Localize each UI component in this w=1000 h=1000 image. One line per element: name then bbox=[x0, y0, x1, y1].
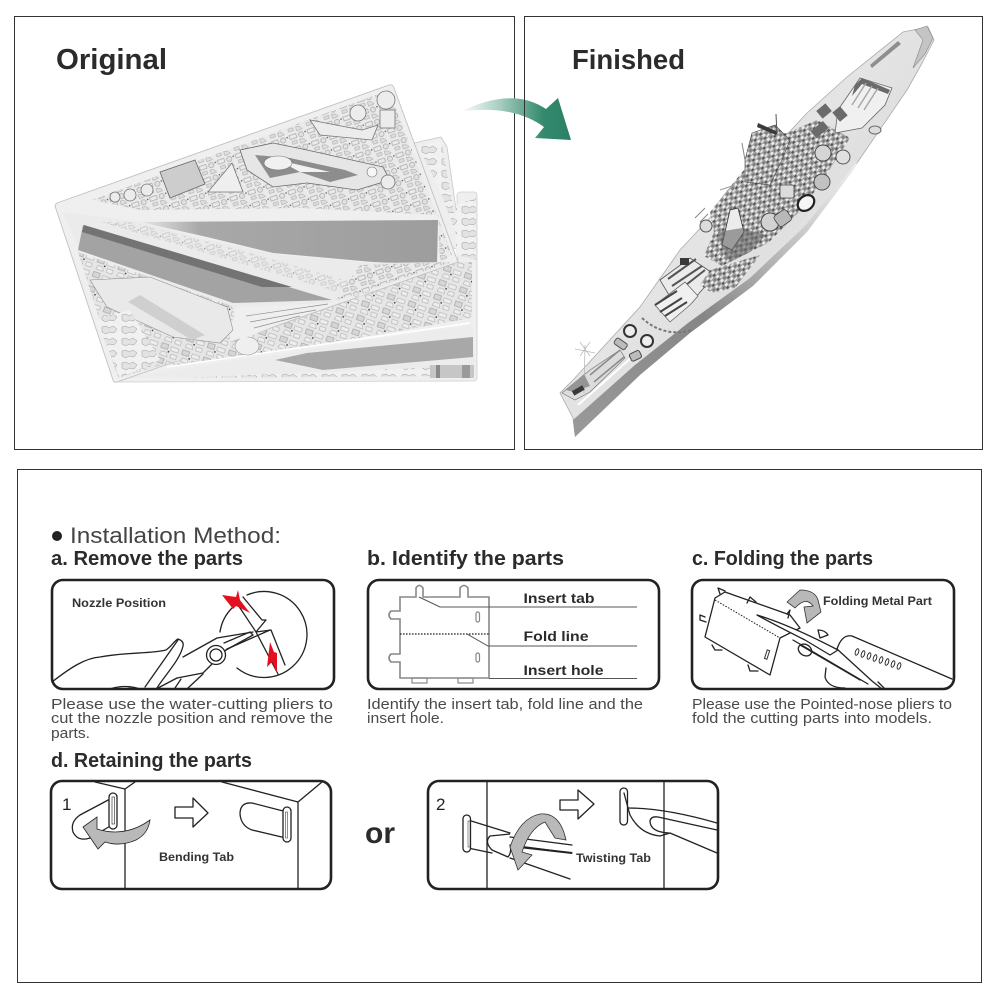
tab left bbox=[468, 820, 510, 853]
deck block part bbox=[160, 160, 205, 198]
step b: identify the parts bbox=[367, 548, 659, 727]
heading a: a. Remove the parts bbox=[51, 548, 243, 570]
hull deck plan bbox=[240, 143, 390, 190]
label: nozzle position: Nozzle Position bbox=[72, 598, 166, 610]
illustration c bbox=[692, 580, 954, 689]
caption c: Please use the Pointed-nose pliers to bbox=[692, 696, 952, 713]
sheet: top-most with hull deck bbox=[55, 85, 458, 382]
triangular part bbox=[208, 163, 243, 192]
caption a: Please use the water-cutting pliers to bbox=[51, 696, 333, 713]
nozzle detail circle bbox=[220, 592, 307, 678]
heading b: b. Identify the parts bbox=[367, 548, 564, 570]
box edges bbox=[95, 782, 322, 889]
metal sheet being folded bbox=[705, 592, 800, 675]
hull bbox=[560, 27, 934, 435]
turrets and gear bbox=[695, 145, 850, 232]
label: insert tab: Insert tab bbox=[524, 590, 594, 606]
bent tab left bbox=[72, 798, 112, 839]
sheet: back-middle bbox=[405, 137, 462, 250]
step c: folding the parts bbox=[692, 548, 954, 727]
forward deck structure bbox=[811, 26, 933, 138]
tab right with pliers bbox=[620, 788, 628, 825]
caption c: fold the cutting parts into models. bbox=[692, 710, 932, 727]
red cut marks bbox=[222, 590, 250, 613]
panel: finished bbox=[524, 16, 982, 450]
gear parts bbox=[110, 91, 395, 202]
section heading: Installation Method: bbox=[70, 523, 281, 548]
leader lines bbox=[419, 597, 637, 678]
slots and bottom tabs bbox=[412, 612, 480, 683]
caption b: Identify the insert tab, fold line and the bbox=[367, 696, 643, 713]
sheet: front bbox=[115, 192, 477, 382]
pliers bbox=[52, 597, 285, 689]
heading: original: Original bbox=[56, 44, 167, 76]
pliers on tab bbox=[487, 834, 511, 857]
panel: original bbox=[14, 16, 514, 450]
box edges bbox=[487, 782, 664, 889]
step d: retaining the parts bbox=[51, 750, 718, 889]
hull side band bbox=[573, 162, 857, 437]
battleship model bbox=[560, 26, 934, 437]
label: twisting tab: Twisting Tab bbox=[576, 853, 651, 865]
stern and mast bbox=[562, 342, 625, 400]
caption b: insert hole. bbox=[367, 710, 444, 727]
heading: finished: Finished bbox=[572, 44, 685, 75]
metal sheets bbox=[55, 85, 477, 382]
aft gun turrets bbox=[613, 255, 760, 362]
label: folding metal part: Folding Metal Part bbox=[823, 596, 932, 608]
illustration b bbox=[368, 580, 659, 689]
fold arrow bbox=[787, 590, 821, 623]
pointed-nose pliers bbox=[757, 615, 952, 689]
heading d: d. Retaining the parts bbox=[51, 750, 252, 772]
illustration d1: bending tab bbox=[51, 781, 331, 889]
grip marks bbox=[854, 648, 902, 670]
lower hull plan part bbox=[90, 277, 233, 343]
grey bend arrow bbox=[83, 817, 150, 849]
illustration d2: twisting tab bbox=[428, 781, 718, 889]
panel: installation method bbox=[18, 470, 982, 982]
arrow: original to finished bbox=[460, 98, 571, 140]
step arrow bbox=[560, 790, 594, 819]
caption a: cut the nozzle position and remove the bbox=[51, 710, 333, 727]
superstructure bbox=[704, 114, 850, 266]
step arrow bbox=[175, 798, 208, 827]
or separator: or bbox=[365, 817, 395, 850]
number 2: 2 bbox=[436, 795, 445, 814]
heading c: c. Folding the parts bbox=[692, 548, 873, 570]
fold line dashes bbox=[400, 633, 489, 635]
number 1: 1 bbox=[62, 795, 71, 814]
grey twist arrow bbox=[510, 814, 566, 870]
label: bending tab: Bending Tab bbox=[159, 852, 234, 864]
illustration a bbox=[52, 580, 334, 689]
caption a: parts. bbox=[51, 725, 90, 742]
bent tab right bbox=[240, 803, 287, 838]
label: insert hole: Insert hole bbox=[524, 662, 604, 678]
step a: remove the parts bbox=[51, 548, 334, 742]
label: fold line: Fold line bbox=[524, 628, 589, 644]
metal part outline bbox=[389, 586, 489, 678]
